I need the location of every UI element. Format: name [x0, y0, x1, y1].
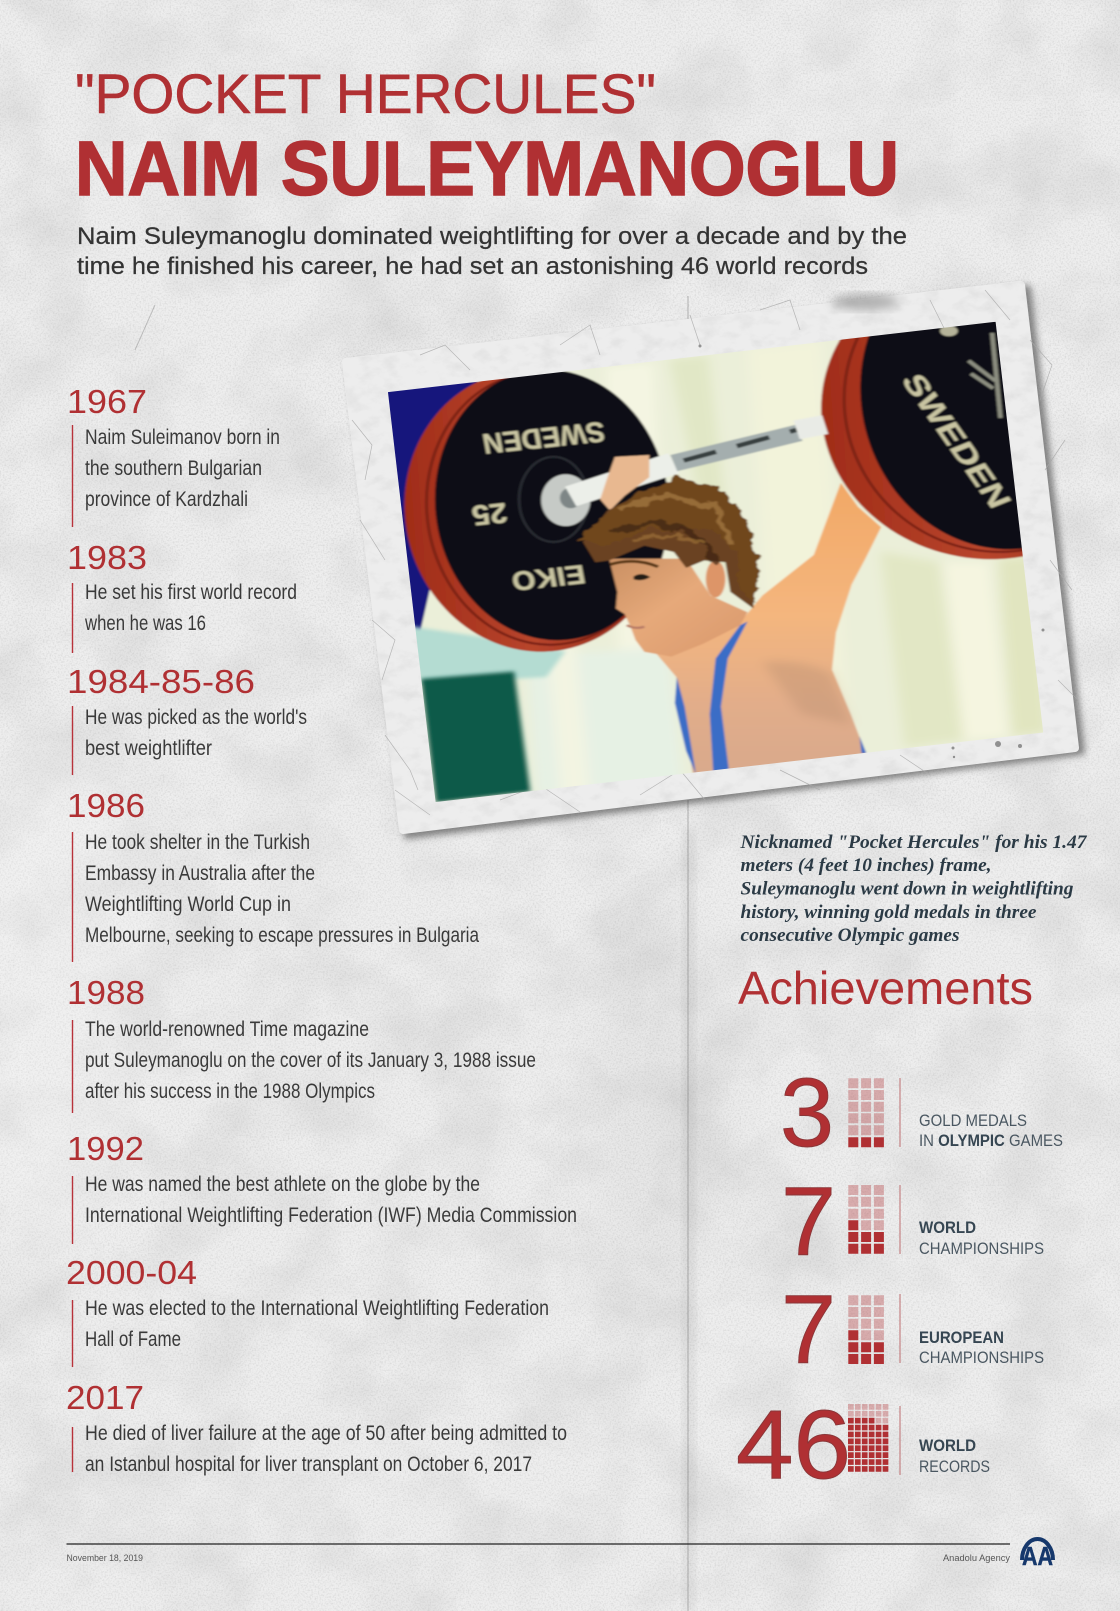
stat: 46 world records: [736, 1390, 990, 1499]
footer: [66, 1539, 1053, 1571]
entry: 1986: [67, 788, 479, 962]
plate text: SWEDEN: [480, 415, 607, 459]
timeline: [66, 384, 577, 1476]
grid: 7 of 18: [848, 1300, 884, 1359]
stat: 46 world records: WORLD: [919, 1437, 976, 1455]
entry: 1983: when he was 16: [84, 612, 206, 635]
achievements: [736, 1058, 1063, 1499]
entry: 1983: [67, 540, 297, 653]
stat: 3 Olympic gold medals: GOLD MEDALS: [919, 1112, 1027, 1130]
entry: 2017: He died of liver failure at the age of 50 after being admitted to: [85, 1422, 567, 1445]
agency name: Anadolu Agency: [943, 1553, 1011, 1563]
entry: 1967: province of Kardzhali: [85, 488, 248, 511]
entry: 1988: put Suleymanoglu on the cover of its January 3, 1988 issue: [85, 1049, 536, 1072]
stat: 46 world records: RECORDS: [919, 1458, 990, 1476]
entry: 2000-04: Hall of Fame: [85, 1328, 181, 1351]
plate brand: EIKO: [509, 559, 588, 597]
entry: 1967: Naim Suleimanov born in: [85, 426, 280, 449]
entry: 1986: He took shelter in the Turkish: [85, 831, 310, 854]
entry: 1986: Weightlifting World Cup in: [85, 893, 291, 916]
photo frame: [342, 281, 1089, 843]
stat: 7 world championships: 7: [781, 1167, 836, 1276]
entry: 1992: 1992: [67, 1131, 144, 1168]
entry: 1984-85-86: He was picked as the world's: [85, 706, 307, 729]
lifter's hair: [578, 477, 758, 609]
lifter's hand: [600, 455, 649, 510]
entry: 1967: the southern Bulgarian: [85, 457, 262, 480]
grid: 7 of 18: [848, 1190, 884, 1249]
entry: 1983: 1983: [67, 540, 147, 577]
entry: 1986: Embassy in Australia after the: [85, 862, 315, 885]
entry: 1983: He set his first world record: [85, 581, 297, 604]
stat: 7 world championships: WORLD: [919, 1219, 976, 1237]
right weight plate: SWEDEN: [894, 369, 1018, 513]
intro text: Naim Suleymanoglu dominated weightlifting for over a decade and by the: [77, 223, 907, 250]
right weight plate: [820, 322, 1023, 560]
entry: 1967: [67, 384, 280, 527]
grid: 46 of 60: [848, 1407, 889, 1469]
stat: 7 European championships: [781, 1275, 1044, 1384]
stat: 7 European championships: EUROPEAN: [919, 1329, 1004, 1347]
title: [75, 62, 899, 212]
grid: 3 of 18: [848, 1083, 884, 1142]
entry: 1986: Melbourne, seeking to escape pressures in Bulgaria: [85, 924, 479, 947]
photo caption: consecutive Olympic games: [740, 926, 960, 946]
entry: 2017: an Istanbul hospital for liver transplant on October 6, 2017: [85, 1453, 532, 1476]
photo: weightlifter holding barbell overhead: [388, 322, 1043, 802]
entry: 1986: 1986: [67, 788, 145, 825]
photo caption: Suleymanoglu went down in weightlifting: [740, 880, 1074, 900]
lifter's arm and torso: [654, 483, 881, 777]
stat: 7 world championships: [781, 1167, 1044, 1276]
entry: 2000-04: 2000-04: [66, 1255, 197, 1292]
entry: 1988: after his success in the 1988 Olympics: [85, 1080, 375, 1103]
entry: 1992: International Weightlifting Federation (IWF) Media Commission: [85, 1204, 577, 1227]
entry: 1992: [67, 1131, 577, 1244]
title line: name: NAIM SULEYMANOGLU: [75, 126, 899, 212]
entry: 2017: 2017: [66, 1380, 144, 1417]
photo caption: [739, 833, 1087, 946]
entry: 2000-04: [66, 1255, 549, 1367]
entry: 1967: 1967: [67, 384, 147, 421]
stat: 3 Olympic gold medals: IN OLYMPIC GAMES: [919, 1132, 1063, 1150]
left weight plate: [395, 364, 678, 657]
achievements heading: Achievements: [738, 962, 1033, 1014]
singlet straps: [675, 622, 866, 774]
stat: 7 European championships: CHAMPIONSHIPS: [919, 1349, 1044, 1367]
stat: 46 world records: 46: [736, 1390, 851, 1499]
entry: 1984-85-86: best weightlifter: [85, 737, 212, 760]
date: November 18, 2019: [66, 1553, 143, 1563]
intro text: time he finished his career, he had set an astonishing 46 world records: [77, 253, 868, 280]
icon: Anadolu Agency logo: AA: [1022, 1541, 1053, 1571]
photo caption: Nicknamed "Pocket Hercules" for his 1.47: [739, 833, 1087, 853]
entry: 1988: 1988: [67, 975, 145, 1012]
barbell: [571, 425, 825, 496]
title line: nickname: "POCKET HERCULES": [75, 62, 656, 125]
stat: 3 Olympic gold medals: [780, 1058, 1063, 1167]
stat: 3 Olympic gold medals: 3: [780, 1058, 834, 1167]
stat: 7 European championships: 7: [781, 1275, 836, 1384]
entry: 1984-85-86: 1984-85-86: [67, 664, 255, 701]
entry: 2000-04: He was elected to the International Weightlifting Federation: [85, 1297, 549, 1320]
stat: 7 world championships: CHAMPIONSHIPS: [919, 1240, 1044, 1258]
entry: 1992: He was named the best athlete on the globe by the: [85, 1173, 480, 1196]
intro text: [77, 223, 907, 280]
photo caption: meters (4 feet 10 inches) frame,: [740, 856, 992, 876]
lifter's face: [609, 559, 748, 657]
entry: 1988: The world-renowned Time magazine: [85, 1018, 369, 1041]
entry: 1988: [67, 975, 536, 1113]
entry: 1984-85-86: [67, 664, 307, 775]
plate number: 25: [469, 496, 510, 531]
photo caption: history, winning gold medals in three: [740, 903, 1036, 923]
entry: 2017: [66, 1380, 567, 1476]
